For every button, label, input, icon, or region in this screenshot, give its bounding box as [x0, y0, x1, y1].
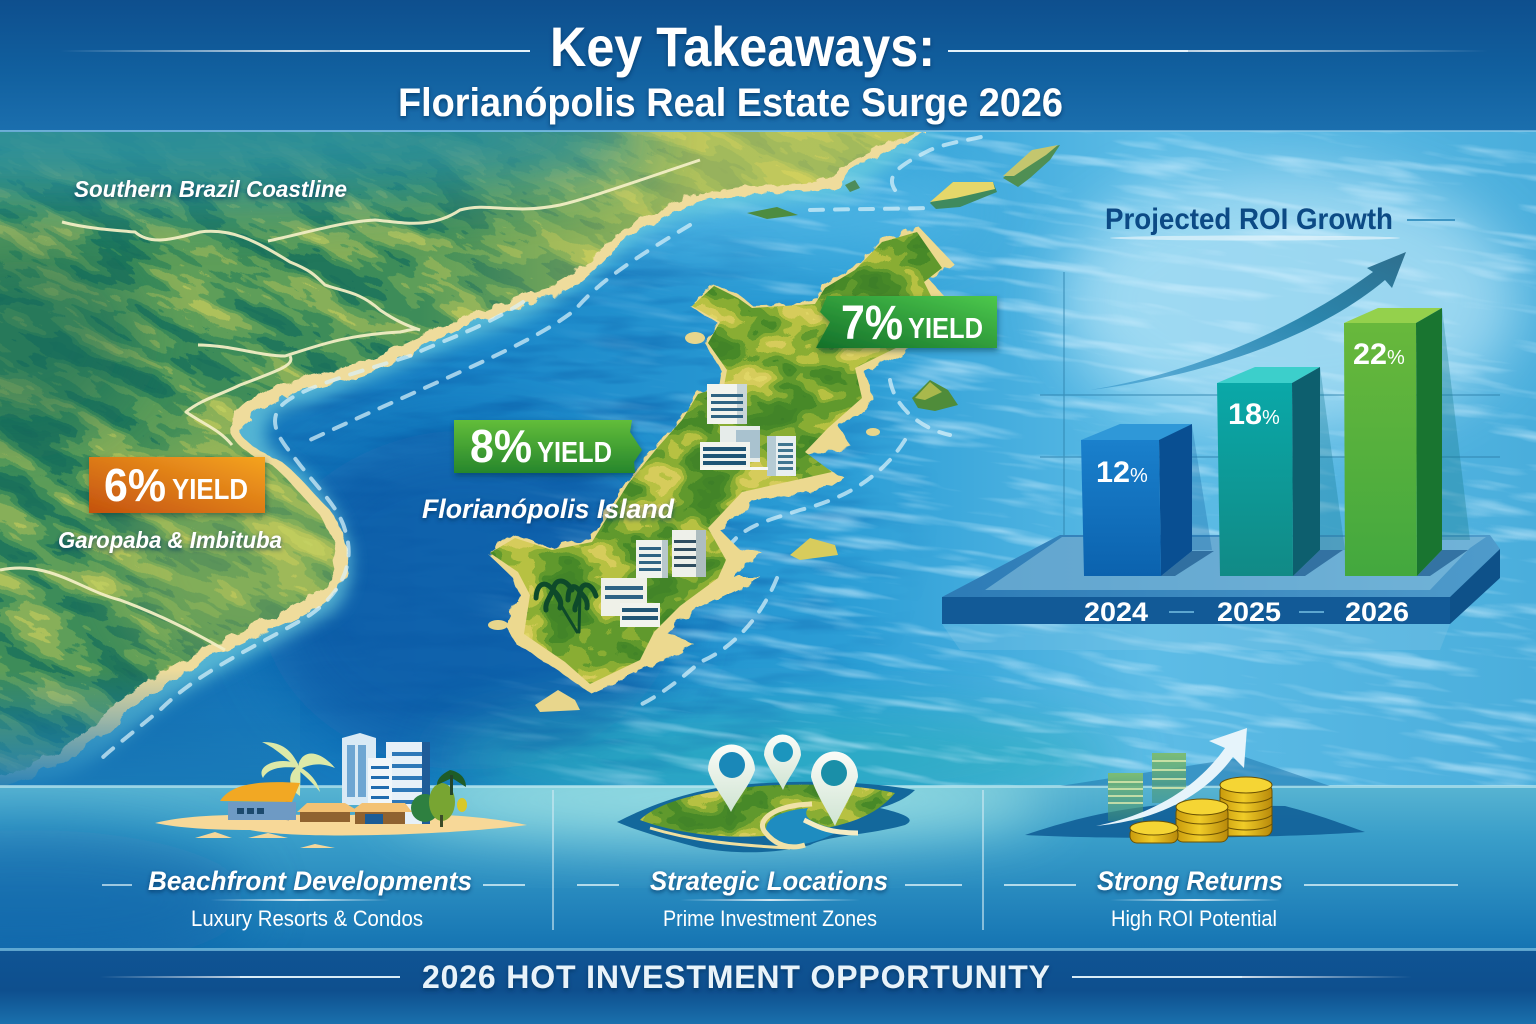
badge: 7% yield: YIELD: [908, 313, 983, 345]
feature: beachfront developments: Luxury Resorts & Condos: [191, 906, 423, 931]
title: Key Takeaways:: [550, 15, 935, 78]
feature: beachfront developments: Beachfront Developments: [148, 866, 472, 896]
feature: strategic locations: Strategic Locations: [650, 866, 888, 896]
feature: strategic locations: [577, 866, 962, 931]
main palm: [286, 764, 298, 820]
feature: strong returns: [1004, 866, 1458, 931]
island sand: [487, 228, 955, 694]
badge: 6% yield: 6%: [104, 459, 166, 511]
badge: 6% yield: YIELD: [172, 474, 248, 506]
mainland coast map: [0, 132, 1018, 786]
map label: Garopaba and Imbituba: Garopaba & Imbituba: [58, 527, 282, 553]
badge: 8% yield: YIELD: [537, 437, 612, 469]
year labels: 2025: [1217, 597, 1281, 627]
header band: [0, 0, 1536, 132]
badge: 8% yield: [454, 420, 642, 473]
fade into lower band: [0, 674, 206, 786]
small offshore islands: [488, 145, 1060, 712]
bar 2025: 18: [1228, 398, 1262, 431]
bar 2026: %: [1387, 347, 1405, 369]
platform: [942, 535, 1500, 650]
towers: [342, 733, 376, 805]
Florianópolis island: [487, 228, 955, 694]
footer banner: 2026 HOT INVESTMENT OPPORTUNITY: [422, 959, 1050, 995]
badge: 8% yield: 8%: [470, 420, 532, 472]
badge: 7% yield: 7%: [841, 297, 903, 350]
trees: [411, 794, 439, 822]
bar 2024: [1081, 424, 1212, 576]
palm trees: [536, 581, 596, 632]
feature: strong returns: Strong Returns: [1097, 866, 1283, 896]
bar 2025: [1217, 367, 1345, 576]
island forest: [490, 232, 942, 684]
lower feature band: [0, 760, 1536, 970]
year labels: 2024: [1084, 597, 1148, 627]
resort buildings south: [601, 530, 706, 627]
icon: coins and growth arrow: [1025, 728, 1365, 843]
subtitle: Florianópolis Real Estate Surge 2026: [398, 81, 1063, 125]
chart: projected ROI growth: [942, 203, 1500, 650]
bar 2024: 12: [1096, 456, 1130, 489]
coastal shallows: [0, 132, 950, 800]
icon: island with map pins: [617, 734, 915, 852]
feature: strategic locations: Prime Investment Zones: [663, 906, 877, 931]
year labels: 2026: [1345, 597, 1409, 627]
resort buildings north: [700, 384, 796, 476]
badge: 6% yield: [89, 457, 265, 513]
bar 2026: [1344, 308, 1470, 576]
badge: 7% yield: [816, 296, 997, 350]
feature: beachfront developments: [102, 866, 525, 931]
bar 2025: %: [1262, 407, 1280, 429]
bungalows: [297, 803, 360, 812]
sand shoreline: [0, 100, 925, 790]
road lines: [0, 160, 700, 650]
bar 2026: 22: [1353, 338, 1387, 371]
green land texture: [0, 132, 916, 776]
chart gridlines: [1040, 272, 1500, 536]
map label: Southern Brazil Coastline: Southern Brazil Coastline: [74, 176, 347, 202]
bar 2024: %: [1130, 465, 1148, 487]
chart title: Projected ROI Growth: [1105, 203, 1393, 236]
icon: beachfront resort: [155, 733, 527, 848]
year labels: [1084, 597, 1409, 627]
surf dashes: [100, 136, 985, 760]
map label: Florianópolis Island: Florianópolis Island: [422, 494, 674, 524]
thatched hut: [220, 782, 300, 802]
footer banner: [0, 948, 1536, 1024]
ocean background: [190, 131, 1536, 786]
feature: strong returns: High ROI Potential: [1111, 906, 1277, 931]
growth arrow: [1090, 252, 1406, 390]
